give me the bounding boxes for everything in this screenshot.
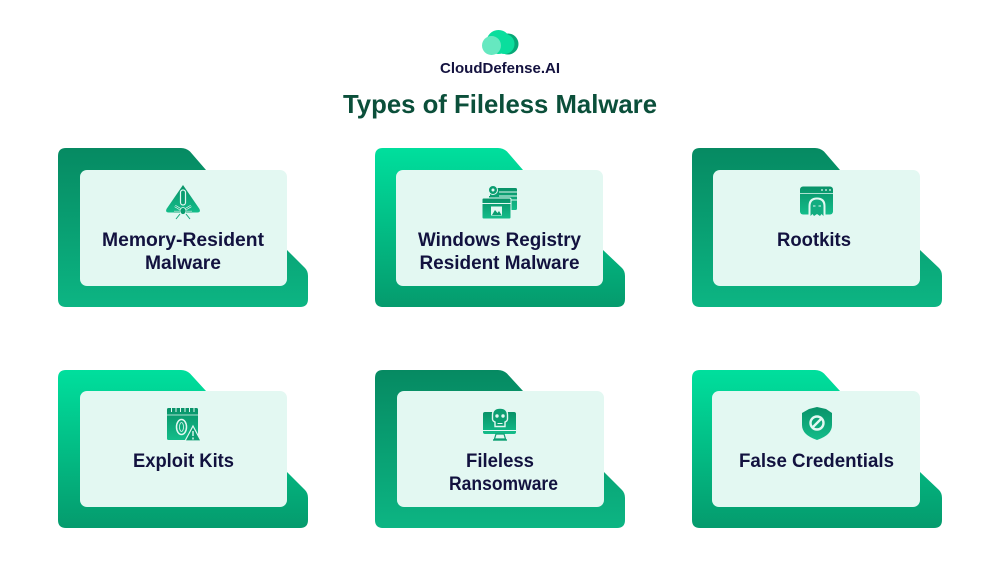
icon: browser windows with image: [482, 186, 517, 219]
label: Rootkits: [777, 230, 851, 251]
icon: calendar with zero and warning: [167, 407, 201, 441]
label line 2: Ransomware: [449, 474, 558, 495]
panel: False Credentials: [692, 370, 942, 528]
icon: browser window with ghost: [800, 186, 833, 218]
panel: Windows Registry Resident Malware: [375, 148, 625, 307]
panel: Fileless Ransomware: [375, 370, 625, 528]
label: False Credentials: [739, 451, 894, 472]
logo icon: cloud: [482, 30, 518, 55]
label: Fileless: [466, 451, 534, 472]
panel: Rootkits: [692, 148, 942, 307]
icon: monitor with skull: [483, 408, 516, 440]
panel: Memory-Resident Malware: [58, 148, 308, 307]
label: Exploit Kits: [133, 451, 234, 472]
label: Windows Registry: [418, 230, 581, 251]
icon: warning triangle with bug: [166, 185, 200, 219]
label line 2: Malware: [145, 253, 221, 274]
panel: Exploit Kits: [58, 370, 308, 528]
label line 2: Resident Malware: [420, 253, 580, 274]
logo wordmark: CloudDefense.AI: [440, 60, 560, 77]
title: Types of Fileless Malware: [343, 89, 657, 119]
label: Memory-Resident: [102, 230, 265, 251]
logo: CloudDefense.AI: [440, 30, 560, 77]
icon: shield with prohibition sign: [802, 407, 832, 440]
